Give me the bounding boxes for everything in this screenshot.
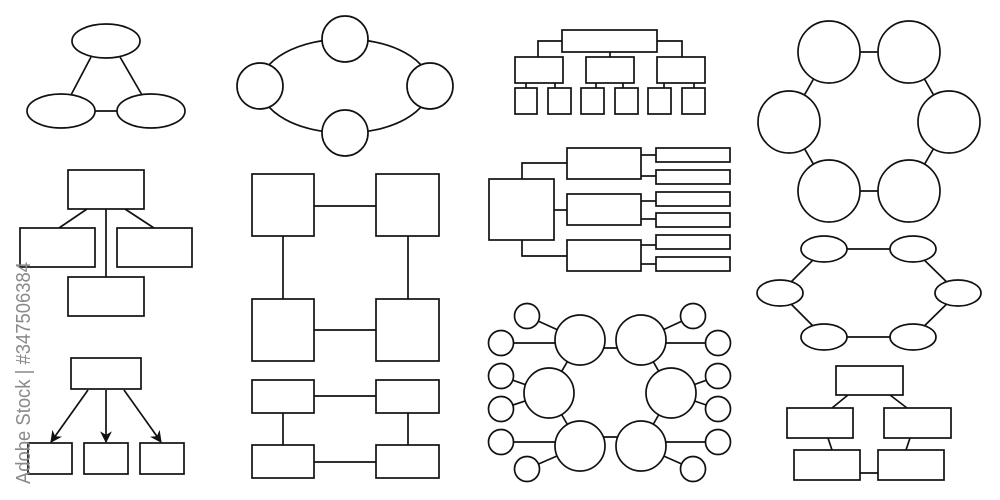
diagram: arrow tree: [28, 358, 184, 474]
diagram: horizontal tree: [489, 148, 730, 271]
diagram: square grid: [252, 174, 439, 361]
diagram: two-level box tree: [787, 366, 951, 480]
watermark text: Adobe Stock | #347506384: [13, 262, 35, 484]
diagram: org chart: [515, 30, 705, 114]
diagram: tree with three children: [20, 170, 192, 316]
diagram: hexagon of circles: [758, 21, 980, 222]
diagram: rectangle loop: [252, 380, 439, 478]
diagram: hexagon of ellipses: [757, 236, 981, 350]
diagram: ellipse triangle: [27, 24, 185, 128]
diagram: mind map: [488, 304, 730, 482]
diagram: circle ring of four: [237, 16, 453, 156]
